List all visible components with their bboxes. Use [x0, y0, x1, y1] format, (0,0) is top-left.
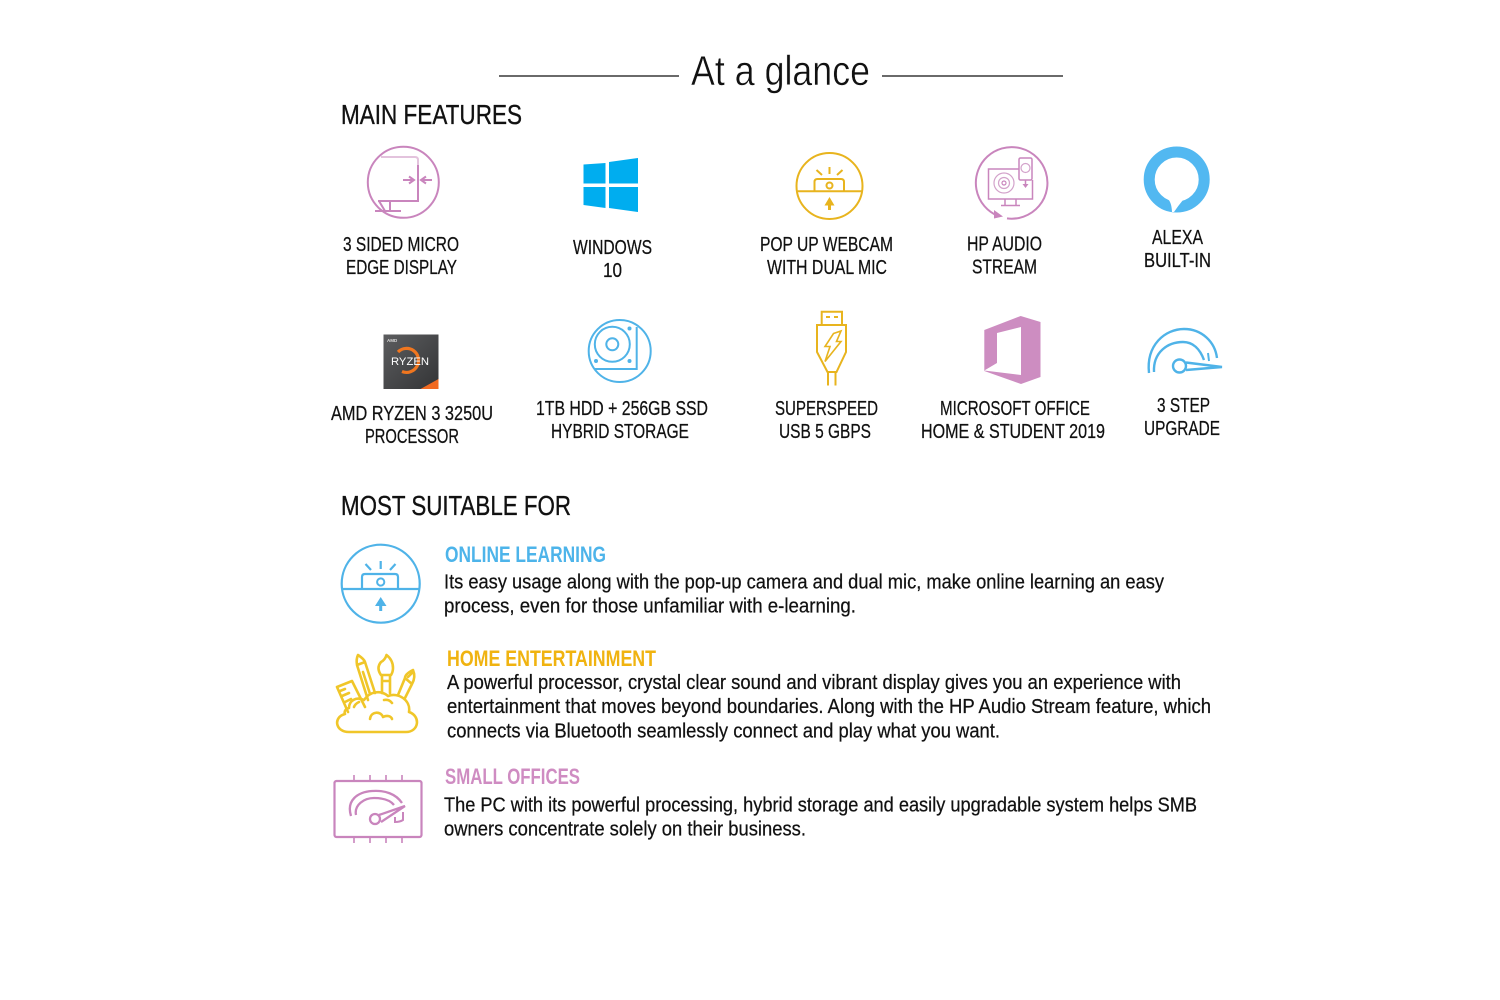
- section: small offices: [334, 764, 1197, 843]
- label: PROCESSOR: [365, 425, 459, 448]
- icon: gauge: [1149, 329, 1222, 373]
- label: SUPERSPEED: [775, 397, 878, 420]
- description: [444, 794, 1197, 840]
- label: BUILT-IN: [1144, 249, 1211, 272]
- label: EDGE DISPLAY: [346, 256, 457, 279]
- label: HOME & STUDENT 2019: [921, 420, 1105, 443]
- feature: windows 10: [573, 158, 652, 282]
- heading: main features: MAIN FEATURES: [341, 99, 522, 130]
- feature: superspeed usb: [775, 312, 878, 443]
- feature: microsoft office: [921, 316, 1105, 443]
- label: [1144, 394, 1220, 440]
- icon: ryzen box: [384, 334, 438, 389]
- icon: alexa ring: [1149, 152, 1204, 212]
- section: home entertainment: [337, 646, 1211, 742]
- label: ALEXA: [1152, 226, 1203, 249]
- label: [536, 397, 708, 443]
- feature: hybrid storage: [536, 320, 708, 443]
- label: STREAM: [972, 256, 1037, 278]
- icon: office logo: [984, 316, 1040, 384]
- icon: hard disk: [589, 320, 651, 382]
- description: The PC with its powerful processing, hybrid storage and easily upgradable system helps SMB: [444, 794, 1197, 816]
- heading: ONLINE LEARNING: [445, 542, 606, 567]
- icon: usb plug: [817, 312, 846, 386]
- heading: HOME ENTERTAINMENT: [447, 646, 656, 671]
- label: POP UP WEBCAM: [760, 233, 893, 256]
- title: At a glance: At a glance: [691, 47, 870, 94]
- label: WITH DUAL MIC: [767, 256, 887, 279]
- description: [444, 570, 1165, 618]
- description: connects via Bluetooth seamlessly connect and play what you want.: [447, 720, 1000, 742]
- description: [447, 671, 1211, 742]
- icon: webcam: [796, 153, 862, 219]
- label: HP AUDIO: [967, 232, 1042, 256]
- label: [573, 236, 652, 282]
- feature: alexa built-in: [1144, 152, 1211, 272]
- icon: ryzen box: AMD: [387, 338, 398, 343]
- label: 10: [603, 259, 622, 282]
- icon: art tools on a cloud: [337, 655, 417, 732]
- label: [343, 233, 459, 279]
- label: USB 5 GBPS: [779, 420, 871, 443]
- description: process, even for those unfamiliar with e-learning.: [444, 594, 856, 618]
- heading: SMALL OFFICES: [445, 764, 580, 789]
- label: [760, 233, 893, 279]
- label: [1144, 226, 1211, 272]
- description: entertainment that moves beyond boundaries. Along with the HP Audio Stream feature, which: [447, 695, 1211, 718]
- label: UPGRADE: [1144, 417, 1220, 440]
- icon: ryzen box: RYZEN: [391, 356, 429, 368]
- label: WINDOWS: [573, 236, 652, 259]
- label: [967, 232, 1042, 278]
- label: HYBRID STORAGE: [551, 420, 689, 443]
- description: Its easy usage along with the pop-up camera and dual mic, make online learning an easy: [444, 570, 1165, 594]
- feature: amd ryzen processor: [331, 334, 493, 448]
- icon: audio stream: [976, 147, 1047, 219]
- label: AMD RYZEN 3 3250U: [331, 402, 493, 425]
- feature: 3 sided micro edge display: [343, 147, 459, 279]
- description: owners concentrate solely on their business.: [444, 818, 806, 840]
- label: 3 STEP: [1157, 394, 1210, 417]
- icon: gauge on a chip: [334, 775, 422, 843]
- label: [921, 397, 1105, 443]
- description: A powerful processor, crystal clear sound and vibrant display gives you an experience with: [447, 671, 1181, 694]
- label: MICROSOFT OFFICE: [940, 397, 1090, 420]
- icon: webcam blue: [342, 545, 420, 623]
- label: 1TB HDD + 256GB SSD: [536, 397, 708, 420]
- feature: 3 step upgrade: [1144, 329, 1222, 440]
- section: online learning: [342, 542, 1165, 623]
- label: 3 SIDED MICRO: [343, 233, 459, 256]
- label: [775, 397, 878, 443]
- icon: windows logo: [584, 158, 638, 212]
- feature: pop up webcam: [760, 153, 893, 279]
- feature: hp audio stream: [967, 147, 1047, 278]
- icon: monitor with narrow bezel: [368, 147, 439, 218]
- heading: most suitable for: MOST SUITABLE FOR: [341, 490, 571, 521]
- label: [331, 402, 493, 448]
